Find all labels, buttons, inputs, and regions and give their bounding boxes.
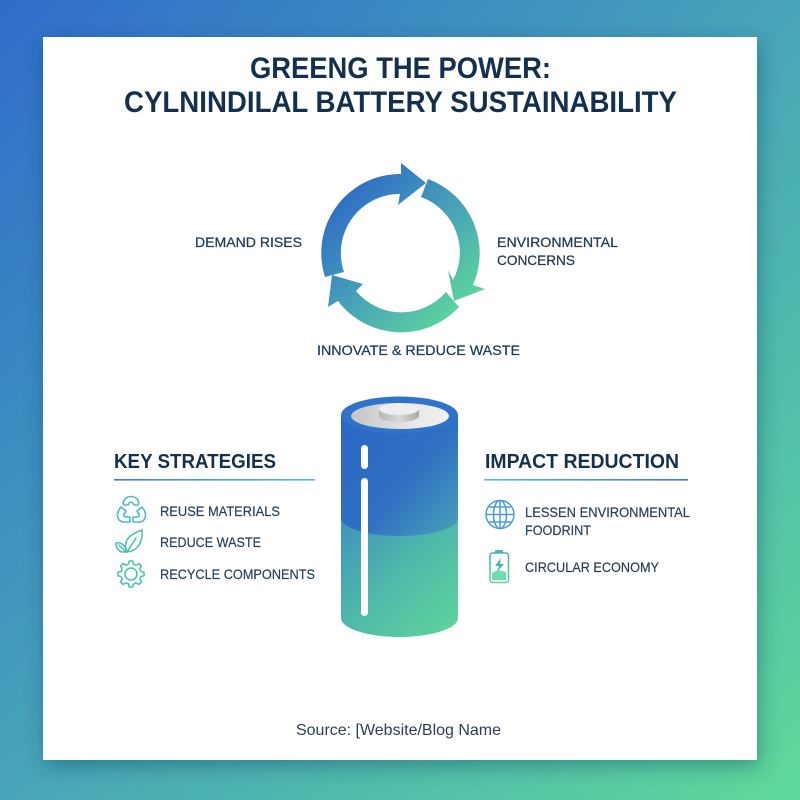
- heading: impact reduction: IMPACT REDUCTION: [485, 451, 679, 473]
- arrow: innovate and reduce waste: [328, 275, 459, 332]
- label: environmental concerns: ENVIRONMENTAL: [497, 234, 618, 250]
- label: environmental concerns: CONCERNS: [497, 252, 575, 268]
- cycle diagram: [195, 163, 618, 358]
- icon: battery: [490, 550, 508, 582]
- label: recycle components: RECYCLE COMPONENTS: [160, 566, 315, 582]
- arrow: environmental concerns: [421, 179, 485, 301]
- icon: gear: [118, 561, 144, 587]
- battery lower body: [341, 500, 458, 637]
- battery upper body: [341, 415, 458, 536]
- highlight short: [361, 445, 368, 469]
- battery top plate: [351, 403, 449, 429]
- label: reuse materials: REUSE MATERIALS: [160, 503, 280, 519]
- label: demand rises: DEMAND RISES: [195, 234, 302, 250]
- label: lessen environmental foodrint: [525, 504, 690, 538]
- icon: globe: [486, 500, 514, 528]
- label: lessen environmental foodrint: LESSEN ENVIRONMENTAL: [525, 504, 690, 520]
- label: circular economy: CIRCULAR ECONOMY: [525, 559, 660, 575]
- label: environmental concerns: [497, 234, 618, 268]
- arrow: demand rises: [321, 163, 426, 277]
- title: GREENG THE POWER:: [250, 52, 551, 85]
- panel: impact reduction: [484, 451, 690, 582]
- battery illustration: [341, 396, 458, 637]
- label: lessen environmental foodrint: FOODRINT: [525, 522, 591, 538]
- heading rule: [484, 479, 688, 481]
- panel: key strategies: [114, 451, 315, 587]
- icon: recycle: [117, 496, 146, 522]
- icon: leaf: [116, 530, 142, 552]
- label: innovate and reduce waste: INNOVATE & REDUCE WASTE: [317, 342, 520, 358]
- highlight long: [361, 478, 368, 616]
- title: CYLNINDILAL BATTERY SUSTAINABILITY: [124, 86, 677, 119]
- heading rule: [114, 479, 315, 481]
- source line: Source: [Website/Blog Name: [296, 722, 501, 739]
- label: reduce waste: REDUCE WASTE: [160, 534, 261, 550]
- battery top rim: [341, 396, 458, 434]
- title: [124, 52, 677, 119]
- battery terminal cap: [379, 403, 419, 422]
- heading: key strategies: KEY STRATEGIES: [114, 451, 276, 473]
